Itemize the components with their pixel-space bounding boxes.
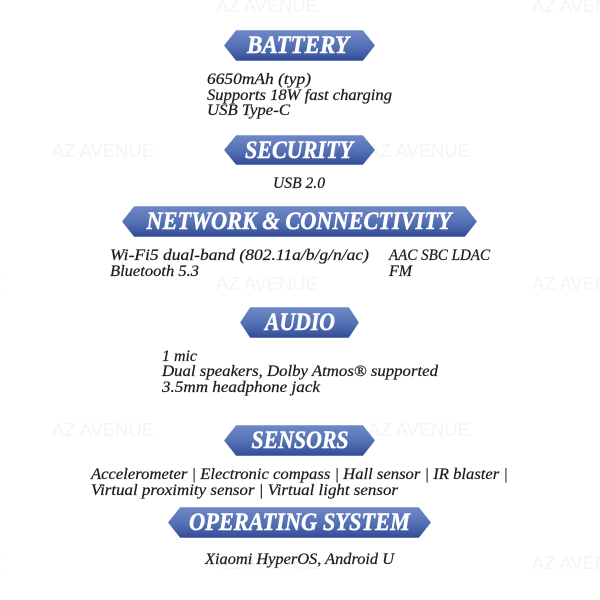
text: network details: Bluetooth 5.3 <box>110 263 199 280</box>
text: network details <box>110 247 369 280</box>
heading: battery <box>225 31 374 60</box>
heading: battery: BATTERY <box>246 32 352 59</box>
section: battery <box>207 31 392 119</box>
watermarks: AZ AVENUE <box>368 141 470 161</box>
text: audio details: Dual speakers, Dolby Atmos® supported <box>161 363 439 380</box>
text: sensor list <box>90 466 508 499</box>
text: network details: Wi-Fi5 dual-band (802.11a/b/g/n/ac) <box>110 247 369 264</box>
text: audio codecs and FM: AAC SBC LDAC <box>388 247 490 264</box>
text: operating system details: Xiaomi HyperOS, Android U <box>204 551 395 568</box>
text: sensor list: Accelerometer | Electronic compass | Hall sensor | IR blaster | <box>90 466 508 483</box>
heading: network and connectivity: NETWORK & CONNECTIVITY <box>146 208 454 235</box>
text: audio details: 3.5mm headphone jack <box>161 379 321 396</box>
heading: sensors: SENSORS <box>252 427 348 454</box>
text: audio details: 1 mic <box>162 348 197 365</box>
heading: operating system: OPERATING SYSTEM <box>189 509 411 536</box>
text: battery details: USB Type-C <box>207 102 290 119</box>
section: sensors <box>90 426 508 499</box>
watermarks: AZ AVENUE <box>216 274 318 294</box>
heading: sensors <box>225 426 374 455</box>
text: audio codecs and FM: FM <box>388 263 414 280</box>
text: sensor list: Virtual proximity sensor | Virtual light sensor <box>91 482 399 499</box>
text: audio codecs and FM <box>388 247 490 280</box>
section: audio <box>161 308 439 396</box>
watermarks: AZ AVENUE <box>216 553 318 573</box>
text: battery details: Supports 18W fast charging <box>207 87 392 104</box>
text: battery details <box>207 71 392 119</box>
section: operating system <box>169 508 430 568</box>
heading: security: SECURITY <box>245 137 355 164</box>
heading: audio: AUDIO <box>263 309 335 336</box>
text: audio details <box>161 348 439 396</box>
watermarks: AZ AVENUE <box>52 420 154 440</box>
section: security <box>225 136 374 192</box>
watermarks: AZ AVENUE <box>52 141 154 161</box>
heading: audio <box>241 308 358 337</box>
text: battery details: 6650mAh (typ) <box>207 71 311 88</box>
text: security details: USB 2.0 <box>273 175 325 192</box>
section: network and connectivity <box>110 207 490 280</box>
watermarks: AZ AVENUE <box>368 420 470 440</box>
